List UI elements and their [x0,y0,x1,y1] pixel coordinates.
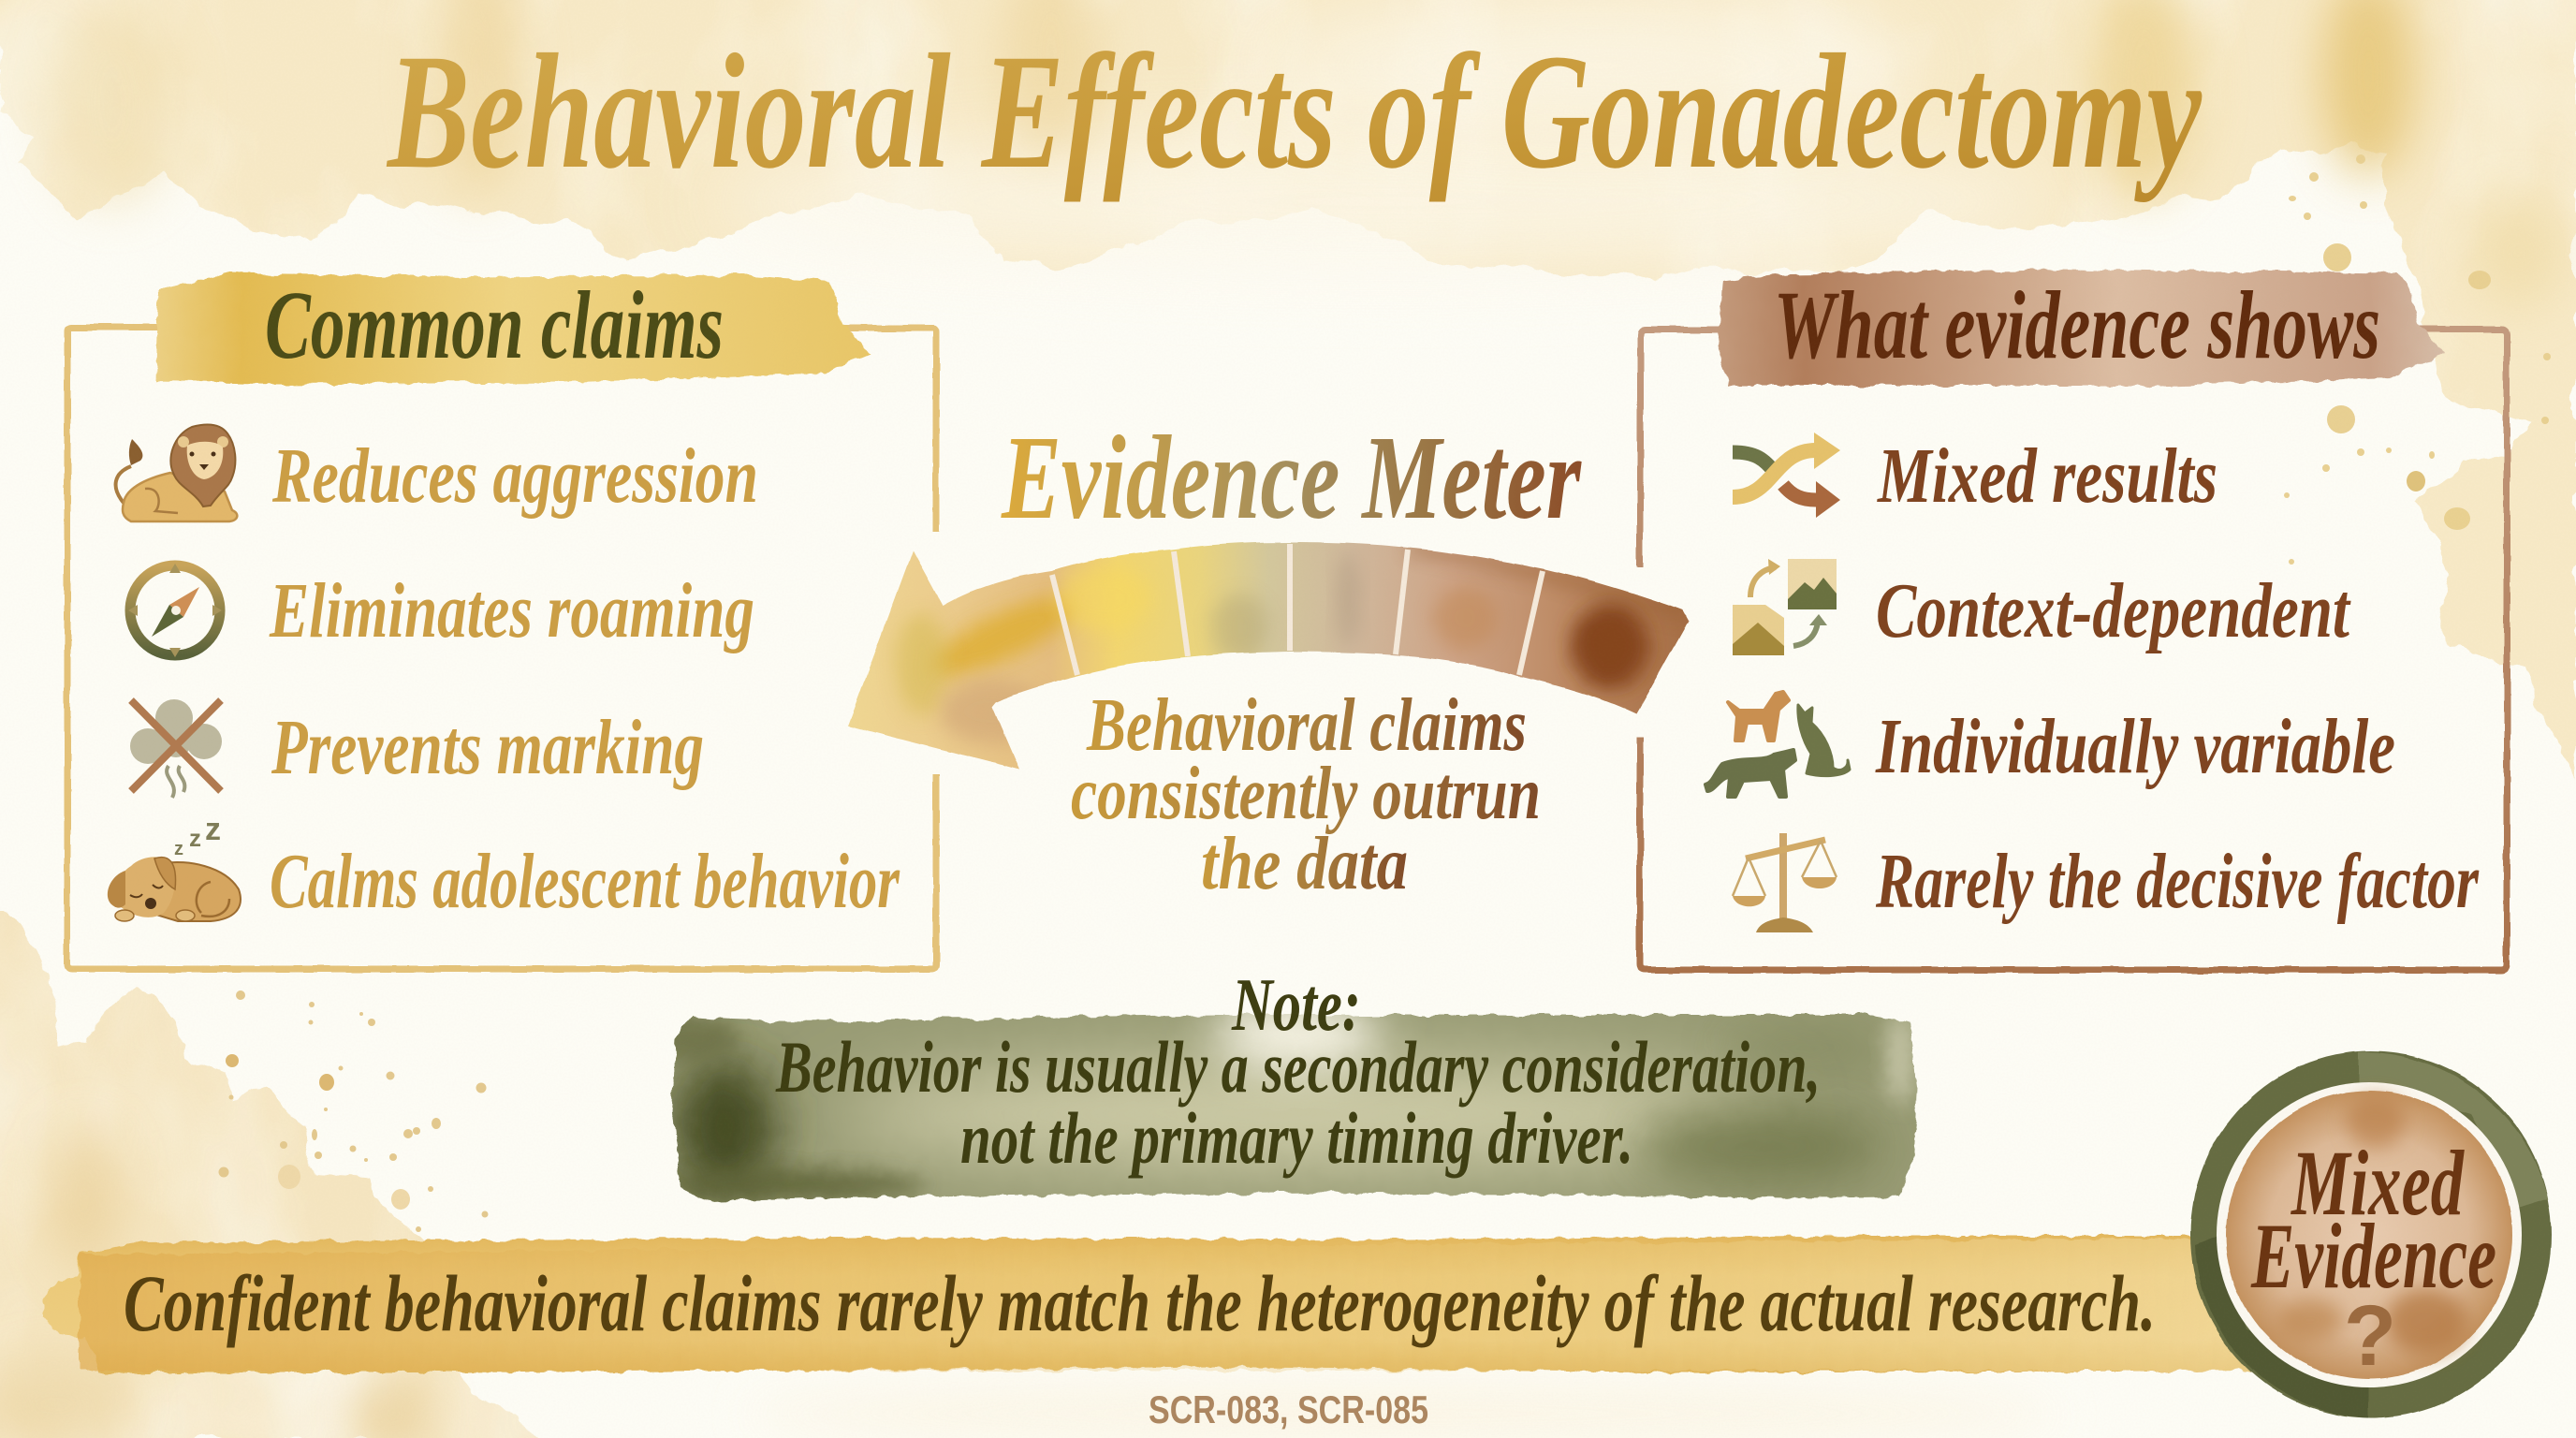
meter arrow pointing left [842,534,1694,777]
icon: compass [128,564,222,657]
claim: eliminates roaming [128,564,754,657]
finding: individually variable: Individually variable [1875,703,2395,790]
claim: calms adolescent behavior: Calms adolescent behavior [270,838,900,925]
icon: dog, cat and large cat [1705,692,1850,797]
note body: Behavior is usually a secondary consideration, [775,1026,1821,1108]
panel border: left [67,328,936,969]
takeaway banner [43,1236,2265,1372]
meter caption [1071,684,1541,905]
badge: mixed evidence [2190,1051,2552,1418]
icon: crossed-out scent [130,699,222,798]
heading band: common claims: Common claims [265,271,724,379]
icon: balance scale [1733,833,1837,932]
source citation: SCR-083, SCR-085 [1149,1387,1428,1431]
finding: mixed results [1733,433,2217,520]
note body [775,1026,1821,1179]
claim: reduces aggression: Reduces aggression [271,433,758,520]
watercolor wash: bottom-left [0,907,540,1438]
meter heading: Evidence Meter [1001,411,1582,544]
finding: context-dependent [1733,559,2351,655]
claim: prevents marking: Prevents marking [271,704,704,791]
watercolor wash: top band [0,0,2576,780]
note box [670,980,1917,1202]
claim: eliminates roaming: Eliminates roaming [269,567,754,654]
icon: crossing arrows [1733,433,1840,518]
note label: Note: [1231,964,1361,1047]
meter caption: the data [1201,823,1408,905]
panel: what evidence shows [1640,270,2507,970]
icon: sleeping puppy [108,812,241,921]
note body: not the primary timing driver. [960,1097,1633,1179]
badge: mixed evidence: Mixed [2291,1131,2465,1235]
claim: prevents marking [130,699,704,798]
evidence meter [842,411,1694,905]
icon: lion [116,425,237,521]
claim: calms adolescent behavior [108,812,900,925]
panel border: right [1640,330,2507,970]
claim: reduces aggression [116,425,758,521]
meter caption: consistently outrun [1071,753,1541,835]
icon: sleeping puppy: z [189,824,201,852]
finding: mixed results: Mixed results [1876,433,2217,520]
meter dividers [1052,544,1543,675]
paint splatter dots: upper right [2284,154,2551,565]
icon: changing landscapes [1733,559,1837,655]
panel: common claims [67,271,936,969]
icon: sleeping puppy: z [174,839,183,859]
icon: sleeping puppy: z [205,812,221,847]
meter caption: Behavioral claims [1086,684,1527,767]
finding: context-dependent: Context-dependent [1876,567,2351,654]
paint splatter dots: lower left [219,990,489,1232]
watercolor wash: bottom-right pale tint [749,1386,2059,1438]
finding: rarely the decisive factor [1733,833,2480,932]
finding: individually variable [1705,692,2395,797]
badge: mixed evidence: ? [2344,1288,2396,1384]
